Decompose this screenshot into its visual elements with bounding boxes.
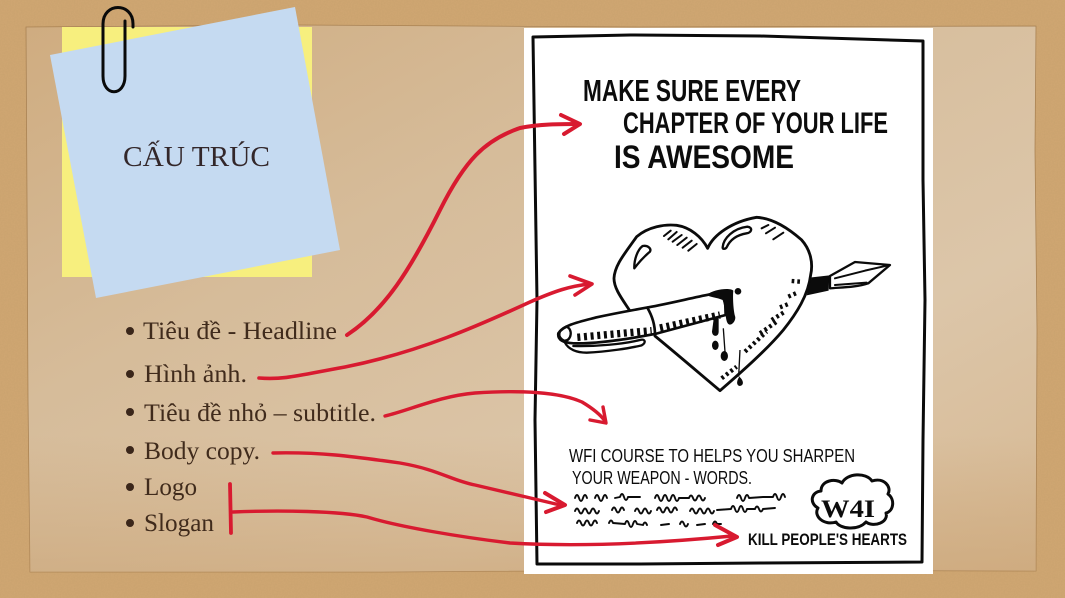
- poster headline: IS AWESOME: [614, 139, 794, 175]
- pen end: [559, 327, 571, 341]
- blue sticky note: [50, 7, 340, 298]
- pen ticks: [577, 315, 720, 337]
- arrow: logo and slogan bracket: [230, 484, 737, 545]
- heart hatching: [664, 225, 783, 251]
- item: body copy: Body copy.: [144, 438, 260, 465]
- pen barrel: [558, 294, 726, 343]
- pen nib: [830, 262, 890, 288]
- pen clip: [565, 340, 645, 353]
- icon: paper clip: [103, 8, 133, 92]
- illustration: heart pierced by pen: [558, 217, 890, 391]
- slogan: KILL PEOPLE'S HEARTS: [748, 531, 907, 549]
- item: slogan: Slogan: [144, 510, 214, 537]
- item: subtitle: Tiêu đề nhỏ – subtitle.: [144, 400, 376, 427]
- logo text: W4I: [821, 496, 875, 523]
- heart side shading: [722, 281, 800, 378]
- poster subtitle: WFI COURSE TO HELPS YOU SHARPEN: [569, 446, 855, 466]
- bullet list: [126, 318, 376, 537]
- arrow: image: [259, 276, 592, 378]
- heart outline: [614, 217, 812, 391]
- title: CẤU TRÚC: [123, 139, 270, 173]
- poster headline: CHAPTER OF YOUR LIFE: [623, 107, 888, 140]
- item: logo: Logo: [144, 474, 197, 501]
- pen cap seam: [647, 308, 655, 335]
- heart highlight left: [634, 246, 650, 268]
- ink blot and drips: [707, 288, 743, 386]
- arrow: headline: [347, 115, 580, 335]
- poster panel: [524, 28, 933, 574]
- nib slit: [835, 265, 888, 285]
- hand-drawn poster frame: [533, 35, 925, 564]
- poster subtitle: YOUR WEAPON - WORDS.: [572, 468, 752, 488]
- pen collar: [807, 275, 829, 295]
- arrow: subtitle: [385, 392, 606, 423]
- poster sheet: [524, 28, 933, 574]
- poster subtitle: [569, 446, 855, 488]
- heart highlight right: [723, 227, 751, 249]
- poster headline: MAKE SURE EVERY: [583, 73, 801, 108]
- item: headline: Tiêu đề - Headline: [143, 318, 337, 345]
- poster body copy scribbles: [575, 494, 785, 527]
- item: image: Hình ảnh.: [144, 361, 247, 388]
- logo cloud: [812, 475, 893, 528]
- arrow: body copy: [273, 453, 565, 512]
- poster headline: [583, 73, 888, 175]
- yellow sticky note: [62, 27, 312, 277]
